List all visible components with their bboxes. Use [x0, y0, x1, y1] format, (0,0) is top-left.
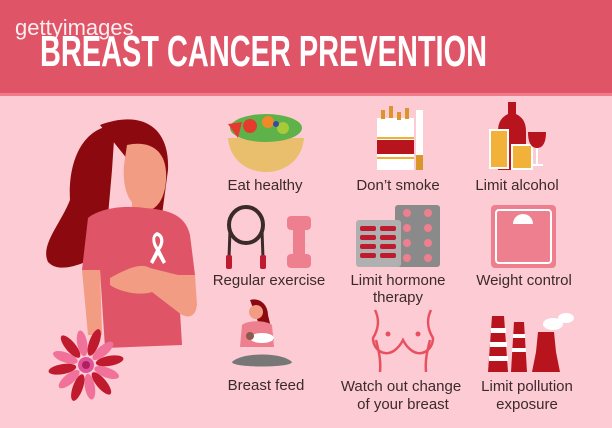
label: weight control: Weight control — [476, 272, 572, 289]
label: don't smoke: Don’t smoke — [356, 177, 440, 194]
label: regular exercise: Regular exercise — [213, 272, 325, 289]
label: limit pollution exposure: Limit pollution — [481, 378, 573, 395]
icon: scale — [491, 205, 556, 268]
label: limit hormone therapy: Limit hormone — [350, 272, 446, 289]
ribbon — [150, 232, 166, 264]
woman illustration — [46, 119, 197, 348]
icon: factory — [488, 313, 574, 372]
label: limit hormone therapy: therapy — [373, 289, 424, 306]
label: watch out change of your breast: of your breast — [357, 396, 450, 413]
icon: breastfeeding woman — [232, 299, 292, 366]
label: breast feed: Breast feed — [228, 377, 304, 394]
label: limit pollution exposure: exposure — [496, 396, 558, 413]
icon: jump rope and dumbbell — [226, 207, 311, 269]
label: limit alcohol: Limit alcohol — [475, 177, 559, 194]
label: watch out change of your breast: Watch out change — [341, 378, 461, 395]
watermark: gettyimages — [15, 15, 134, 40]
icon: salad bowl — [228, 114, 304, 172]
label: eat healthy: Eat healthy — [227, 177, 303, 194]
icon: cigarettes — [377, 106, 423, 170]
flower — [48, 328, 124, 402]
header banner — [0, 0, 612, 96]
icon: breast outline — [373, 310, 433, 372]
icon: pill packs — [356, 205, 440, 267]
icon: alcohol — [490, 102, 546, 170]
